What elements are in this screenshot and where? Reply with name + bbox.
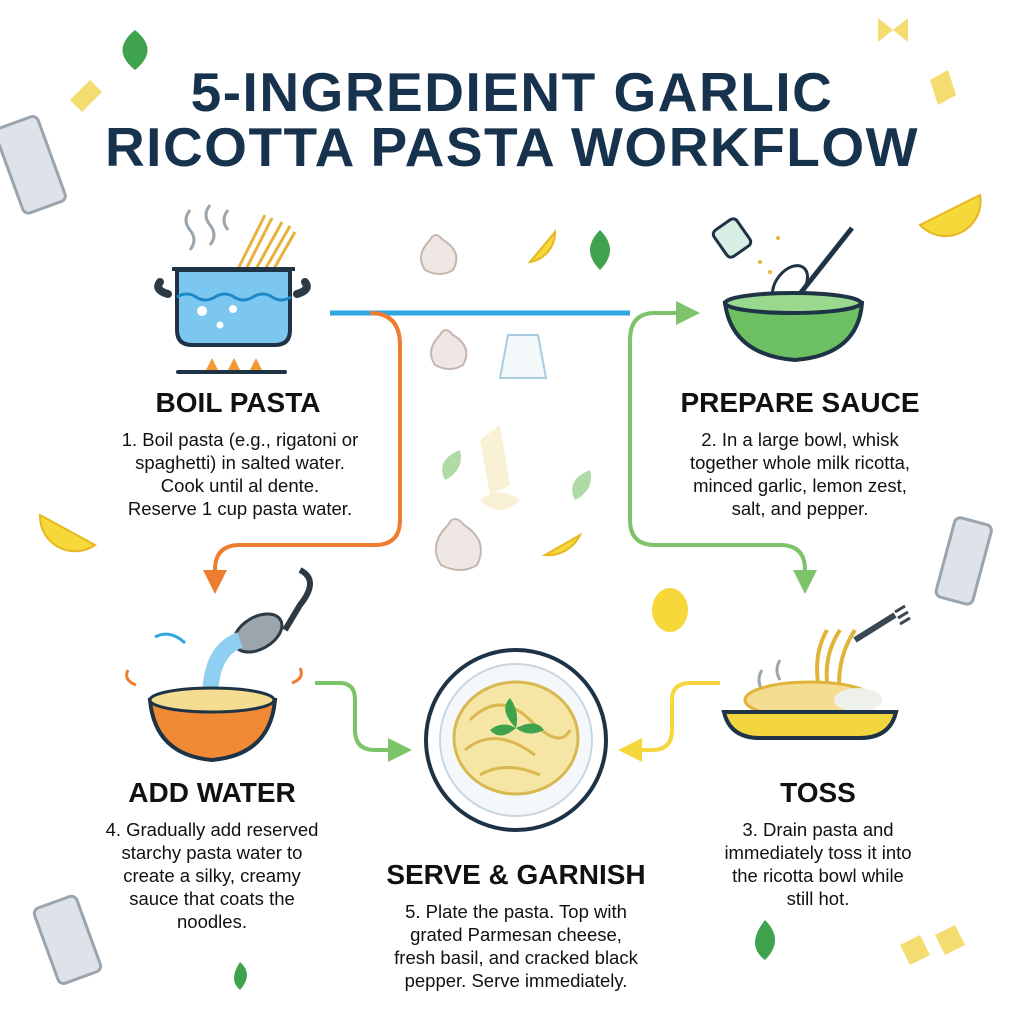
text: add water: create a silky, creamy	[123, 865, 301, 886]
heading: toss: TOSS	[780, 777, 856, 808]
text: boil pasta	[122, 429, 358, 519]
text: toss: 3. Drain pasta and	[742, 819, 894, 840]
icon: bowl with water	[127, 570, 310, 760]
text: serve and garnish: 5. Plate the pasta. Top with	[405, 901, 627, 922]
text: add water: starchy pasta water to	[122, 842, 302, 863]
title	[105, 61, 919, 178]
text: prepare sauce: together whole milk ricotta,	[690, 452, 910, 473]
icon: pan with pasta and fork	[724, 606, 910, 738]
arrow: blue connector	[330, 310, 630, 316]
text: toss: the ricotta bowl while	[732, 865, 904, 886]
text: prepare sauce	[690, 429, 910, 519]
arrow: yellow to serve	[630, 683, 720, 750]
title: 5-INGREDIENT GARLIC	[191, 61, 833, 123]
heading: serve and garnish: SERVE & GARNISH	[386, 859, 646, 890]
icon: center ingredients	[421, 230, 610, 570]
text: prepare sauce: minced garlic, lemon zest,	[693, 475, 907, 496]
text: boil pasta: Reserve 1 cup pasta water.	[128, 498, 352, 519]
text: add water: noodles.	[177, 911, 247, 932]
heading: add water: ADD WATER	[128, 777, 296, 808]
text: toss: still hot.	[787, 888, 849, 909]
icon: plated pasta	[426, 650, 606, 830]
heading: prepare sauce: PREPARE SAUCE	[680, 387, 920, 418]
arrow: orange to add water	[215, 313, 400, 582]
text: add water	[106, 819, 318, 932]
text: serve and garnish: pepper. Serve immediately.	[405, 970, 627, 991]
text: serve and garnish: grated Parmesan cheese,	[410, 924, 622, 945]
text: toss: immediately toss it into	[724, 842, 912, 863]
text: toss	[724, 819, 912, 909]
icon: boiling pot	[158, 205, 307, 372]
text: boil pasta: Cook until al dente.	[161, 475, 319, 496]
text: boil pasta: spaghetti) in salted water.	[135, 452, 345, 473]
arrow: green to prepare sauce and toss	[630, 313, 805, 582]
text: boil pasta: 1. Boil pasta (e.g., rigatoni or	[122, 429, 358, 450]
text: serve and garnish: fresh basil, and cracked black	[394, 947, 638, 968]
icon: bowl with whisk	[711, 217, 862, 360]
arrow: green to serve	[315, 683, 400, 750]
text: add water: sauce that coats the	[129, 888, 295, 909]
text: prepare sauce: 2. In a large bowl, whisk	[701, 429, 899, 450]
text: add water: 4. Gradually add reserved	[106, 819, 318, 840]
text: prepare sauce: salt, and pepper.	[732, 498, 868, 519]
heading: boil pasta: BOIL PASTA	[156, 387, 320, 418]
title: RICOTTA PASTA WORKFLOW	[105, 116, 919, 178]
text: serve and garnish	[394, 901, 638, 991]
